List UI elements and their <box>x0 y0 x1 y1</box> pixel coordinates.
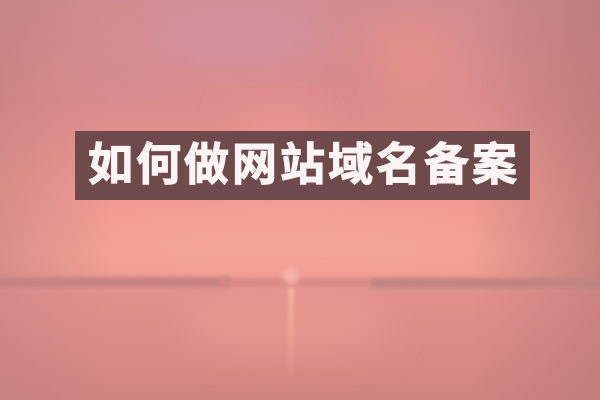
sun glow <box>283 268 299 284</box>
sky <box>0 0 600 285</box>
title: 如何做网站域名备案 <box>88 139 520 190</box>
horizon band <box>0 277 600 288</box>
title banner <box>75 131 530 200</box>
sea <box>0 285 600 400</box>
sun reflection <box>288 288 294 383</box>
